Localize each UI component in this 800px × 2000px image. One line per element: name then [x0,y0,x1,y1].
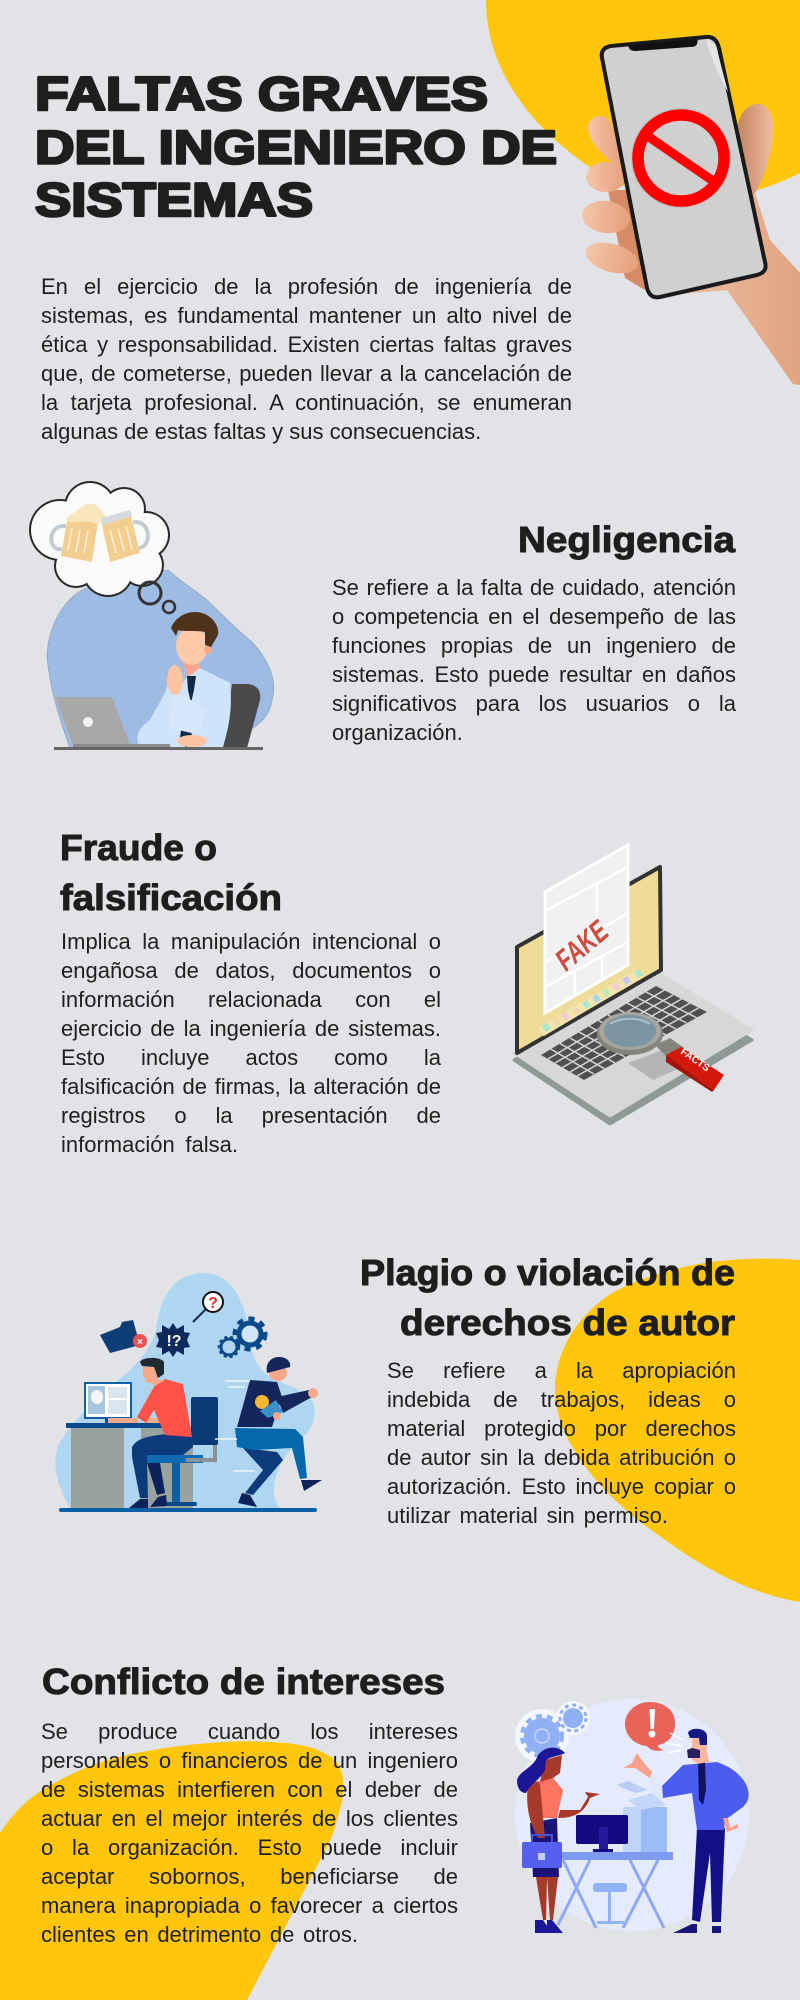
man [623,1729,749,1933]
intro text block: la tarjeta profesional. A continuación, se enumeran [41,390,572,415]
phone highlight [706,40,728,92]
stool [593,1883,627,1924]
intro text block: que, de cometerse, pueden llevar a la cancelación de [41,361,572,386]
body text: autorización. Esto incluye copiar o [387,1474,736,1499]
title: DEL INGENIERO DE [35,120,557,174]
body text: o competencia en el desempeño de las [332,604,736,629]
body text [61,928,441,1156]
body text: organización. [332,720,463,745]
body text: aceptar sobornos, beneficiarse de [41,1864,458,1889]
panel: negligencia [29,481,736,750]
light blue blob [55,1273,315,1508]
heading: Plagio o violación de [360,1252,735,1293]
body text: sistemas. Esto puede resultar en daños [332,662,736,687]
laptop base [514,981,752,1124]
body text: información falsa. [61,1132,238,1156]
thief [235,1357,322,1507]
body text: Implica la manipulación intencional o [61,928,441,954]
panel: fraude o falsificacion [60,830,754,1156]
illustration: two colleagues arguing at a desk [515,1699,749,1933]
illustration: office worker and thief [55,1273,322,1512]
body text: de sistemas interfieren con el deber de [41,1777,458,1802]
icon: magnifier with question mark [193,1292,223,1322]
body text: ejercicio de la ingeniería de sistemas. [61,1016,441,1040]
illustration: hand holding phone with prohibition sign [582,34,800,385]
body text: Se produce cuando los intereses [41,1719,458,1744]
man [137,612,231,748]
icon: burst with question [156,1323,190,1357]
ground line [59,1508,317,1512]
body text [387,1358,736,1528]
body text: indebida de trabajos, ideas o [387,1387,736,1412]
body text: Se refiere a la apropiación [387,1358,736,1383]
pale blue blob [515,1699,749,1931]
speed lines [215,1381,255,1471]
thumb [738,104,773,205]
intro text block: ética y responsabilidad. Existen ciertas faltas graves [41,332,572,357]
body text: Esto incluye actos como la [61,1044,441,1070]
screen colour strip [541,972,641,1032]
body text: clientes en detrimento de otros. [41,1922,358,1947]
body text: manera inapropiada o favorecer a ciertos [41,1893,458,1918]
body text: actuar en el mejor interés de los clientes [41,1806,458,1831]
body text: falsificación de firmas, la alteración de [61,1074,441,1098]
icon: magnifier with question mark: ? [208,1295,218,1312]
body text [41,1719,458,1947]
arm [660,193,800,385]
fingers [580,116,645,290]
speech bubble with exclamation [625,1702,675,1751]
icon: folder with error [100,1320,147,1353]
papers [616,1781,667,1852]
panel: plagio [56,1252,736,1528]
body text: significativos para los usuarios o la [332,691,736,716]
speech rays [665,1733,683,1753]
body text: personales o financieros de un ingeniero [41,1748,458,1773]
icon: gears [219,1319,265,1357]
title: SISTEMAS [35,173,313,226]
body text: registros o la presentación de [61,1102,441,1128]
prohibition sign [631,108,731,208]
body text: información relacionada con el [61,986,441,1012]
icon: folder with error: × [137,1337,143,1348]
office worker [108,1358,193,1508]
fake document [545,845,628,1013]
blob: middle right [555,1259,800,1602]
monitor [576,1815,628,1852]
illustration: man dreaming of beer at laptop [29,481,274,750]
heading: Conflicto de intereses [42,1661,445,1702]
briefcase [522,1835,562,1868]
title [35,67,557,226]
phone [602,37,766,297]
fake stamp: FAKE [549,914,615,977]
panel: conflicto de intereses [41,1661,749,1947]
chair [146,1397,218,1506]
body text: material protegido por derechos [387,1416,736,1441]
blob: top right [486,0,800,198]
body text: funciones propias de un ingeniero de [332,633,736,658]
heading: Negligencia [518,519,736,560]
blob: bottom left [0,1741,343,2000]
keyboard [541,986,707,1080]
desk [66,1423,193,1508]
intro text block [41,274,572,444]
title: FALTAS GRAVES [35,67,488,120]
icon: burst with question: !? [166,1333,182,1350]
phone notch [628,39,698,51]
touchpad [628,1047,682,1080]
body text: engañosa de datos, documentos o [61,958,441,982]
monitor [85,1383,131,1423]
magnifier: FACTS [678,1046,712,1074]
icon: gears [515,1701,590,1763]
illustration: laptop with fake document and magnifier [514,845,752,1124]
thought cloud [29,481,170,597]
icon: beer mugs [51,504,148,562]
blue blob [47,570,274,748]
body text [332,575,736,745]
intro text block: algunas de estas faltas y sus consecuencias. [41,419,481,444]
body text: de autor sin la debida atribución o [387,1445,736,1470]
intro text block: sistemas, es fundamental mantener un alto nivel de [41,303,572,328]
laptop [55,697,170,747]
woman [517,1748,600,1933]
heading [60,827,282,918]
body text: Se refiere a la falta de cuidado, atención [332,575,736,600]
heading: derechos de autor [400,1302,735,1343]
body text: o la organización. Esto puede incluir [41,1835,458,1860]
laptop screen [517,867,661,1053]
desk line [54,747,263,750]
desk [558,1852,673,1928]
chair [223,684,260,748]
intro text block: En el ejercicio de la profesión de ingeniería de [41,274,572,299]
heading: falsificación [60,877,282,918]
thought bubbles [139,582,161,604]
magnifier [597,1012,724,1092]
body text: utilizar material sin permiso. [387,1503,668,1528]
heading [360,1252,735,1343]
